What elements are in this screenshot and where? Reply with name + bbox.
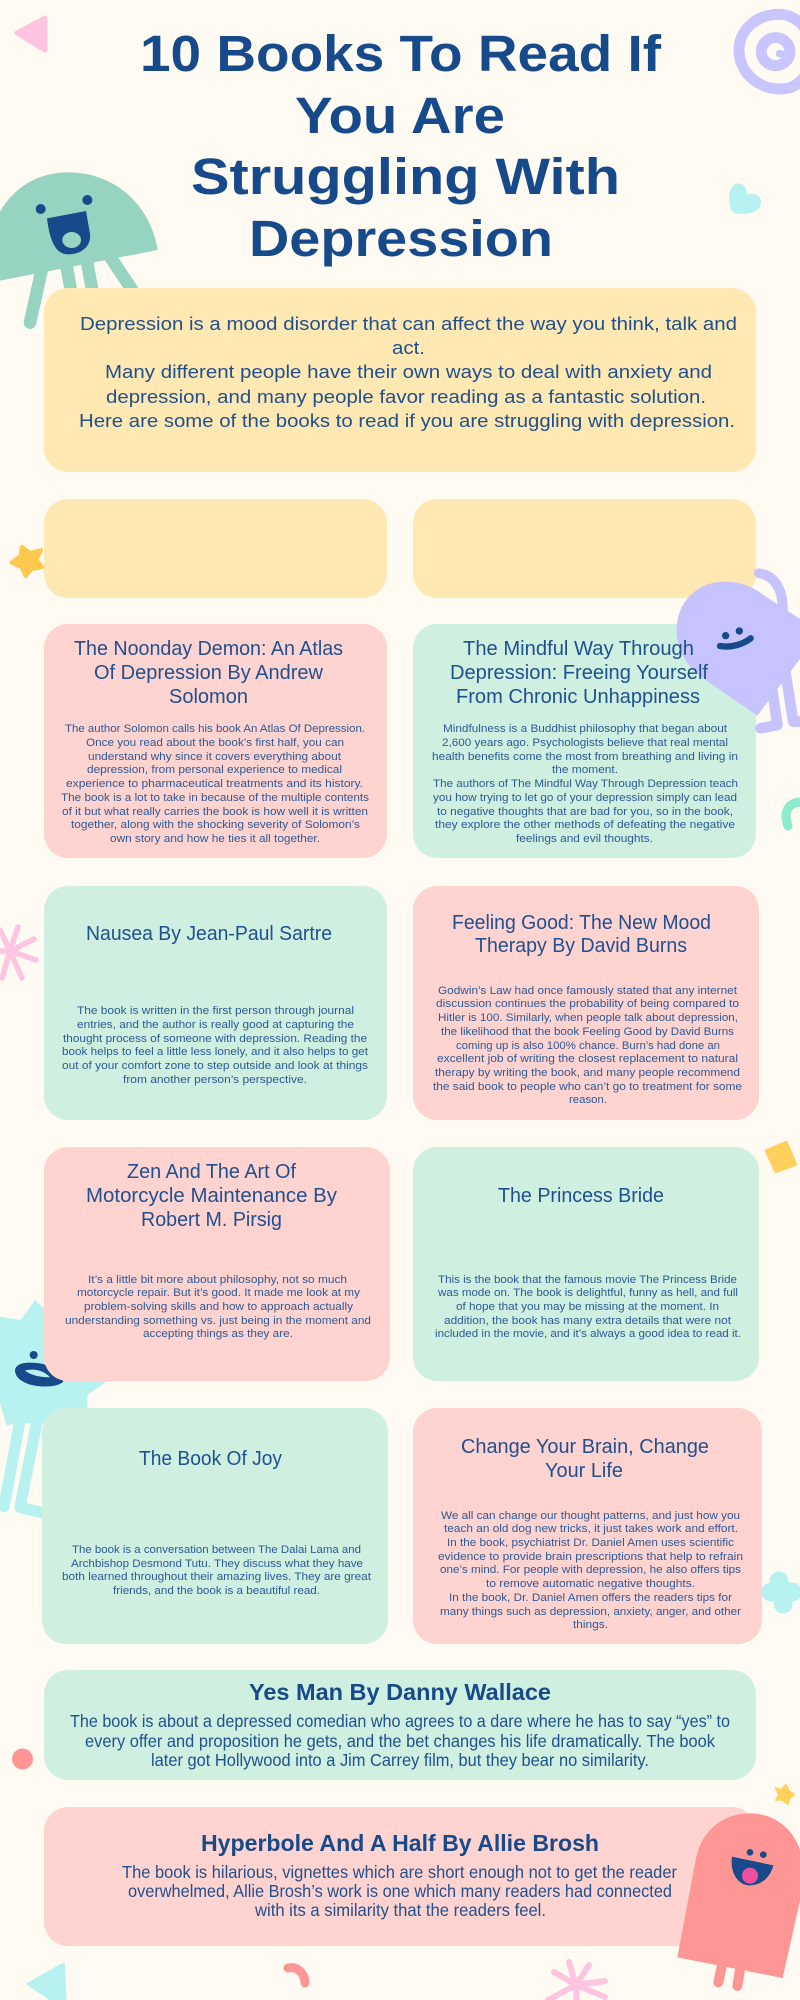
icon: purple spiral (739, 14, 800, 89)
text: The Mindful Way body: The authors of The Mindful Way Through Depression teach (433, 778, 738, 790)
text: Change Your Brain body: evidence to provide brain prescriptions that help to refrain (438, 1551, 743, 1563)
icon: green arc (786, 802, 800, 826)
text: Hyperbole body: The book is hilarious, vignettes which are short enough not to get the reader (122, 1862, 677, 1882)
text: Feeling Good body: Hitler is 100. Similarly, when people talk about depression, (438, 1012, 738, 1024)
panel: Feeling Good (413, 886, 759, 1120)
panel: introduction: Many different people have their own ways to deal with anxiety and (105, 361, 712, 382)
character: purple creature (677, 573, 800, 728)
icon: pink asterisk bottom (548, 1962, 605, 2000)
text: The Book Of Joy body (62, 1544, 372, 1597)
text: Nausea body: from another person’s perspective. (123, 1074, 307, 1086)
text: The Book Of Joy body: The book is a conversation between The Dalai Lama and (72, 1544, 361, 1556)
text: The Noonday Demon body: Once you read about the book’s first half, you can (86, 737, 344, 749)
text: The Mindful Way body (432, 723, 738, 845)
text: Change Your Brain body: We all can change our thought patterns, and just how you (441, 1510, 740, 1522)
text: Nausea body: book helps to feel a little less lonely, and it also helps to get (62, 1046, 369, 1058)
text: Nausea body: thought process of someone with depression. Reading the (63, 1033, 367, 1045)
text: Yes Man body: The book is about a depressed comedian who agrees to a dare where he has to say “yes” to (70, 1711, 730, 1731)
text: Zen body (65, 1274, 371, 1340)
heading: The Mindful Way: Depression: Freeing Yourself (450, 662, 708, 684)
text: The Princess Bride body (435, 1274, 741, 1340)
text: The Mindful Way body: feelings and evil thoughts. (516, 833, 653, 845)
heading: Feeling Good: Feeling Good: The New Mood (452, 912, 711, 934)
text: Change Your Brain body: In the book, Dr. Daniel Amen offers the readers tips for (449, 1592, 732, 1604)
text: Change Your Brain body: many things such as depression, anxiety, anger, and other (440, 1606, 741, 1618)
heading: Zen: Motorcycle Maintenance By (86, 1185, 337, 1207)
text: The Noonday Demon body: depression, from personal experience to medical (87, 764, 342, 776)
text: Feeling Good body: therapy by writing the book, and many people recommend (435, 1067, 740, 1079)
text: The Princess Bride body: included in the movie, and it’s always a good idea to read it. (435, 1328, 741, 1340)
icon: small yellow star (776, 1785, 794, 1804)
text: Change Your Brain body: things. (573, 1619, 608, 1631)
panel: empty yellow card left (44, 499, 387, 598)
heading: Change Your Brain: Change Your Brain, Change (461, 1436, 709, 1458)
text: The Princess Bride body: This is the book that the famous movie The Princess Bride (438, 1274, 737, 1286)
title (140, 25, 662, 267)
panel: The Book Of Joy (42, 1408, 388, 1644)
heading: Change Your Brain: Your Life (545, 1460, 623, 1482)
heading: Zen: Robert M. Pirsig (141, 1209, 282, 1231)
icon: salmon dot (12, 1748, 33, 1770)
heading: Zen: Zen And The Art Of (127, 1161, 296, 1183)
title: You Are (295, 87, 505, 144)
text: The Mindful Way body: 2,600 years ago. Psychologists believe that real mental (442, 737, 728, 749)
text: The Noonday Demon body (61, 723, 369, 845)
text: Feeling Good body: Godwin’s Law had once famously stated that any internet (438, 985, 738, 997)
text: The Noonday Demon body: together, along with the shocking severity of Solomon’s (71, 819, 360, 831)
text: Yes Man body: later got Hollywood into a Jim Carrey film, but they bear no similarity. (151, 1750, 649, 1770)
text: Change Your Brain body: one’s mind. For people with depression, he also offers tips (440, 1564, 741, 1576)
text: Feeling Good body: discussion continues the probability of being compared to (436, 998, 739, 1010)
icon: yellow diamond (767, 1143, 795, 1171)
character: green jellyfish (0, 172, 158, 323)
panel: introduction: depression, and many people favor reading as a fantastic solution. (106, 386, 706, 407)
title: Depression (249, 210, 553, 267)
character: salmon ghost (677, 1813, 800, 1986)
icon: cyan triangle (29, 1965, 65, 2000)
text: Feeling Good body: the likelihood that the book Feeling Good by David Burns (441, 1026, 734, 1038)
heading: Yes Man: Yes Man By Danny Wallace (249, 1679, 551, 1705)
text: The Mindful Way body: the moment. (552, 764, 618, 776)
heading: The Princess Bride: The Princess Bride (498, 1185, 664, 1207)
title: 10 Books To Read If (140, 25, 662, 82)
text: The Book Of Joy body: friends, and the book is a beautiful read. (113, 1585, 320, 1597)
text: Zen body: problem-solving skills and how to approach actually (84, 1301, 353, 1313)
text: The Princess Bride body: was mode on. The book is delightful, funny as hell, and full (437, 1287, 738, 1299)
text: The Mindful Way body: to negative thoughts that are bad for you, so in the book, (437, 806, 733, 818)
text: The Noonday Demon body: of it but what really carries the book is how well it is written (62, 806, 368, 818)
text: Feeling Good body: reason. (569, 1094, 607, 1106)
text: The Princess Bride body: addition, the book has many extra details that were not (444, 1315, 732, 1327)
text: The Princess Bride body: of hope that you may be missing at the moment. In (456, 1301, 719, 1313)
panel: The Noonday Demon (44, 624, 387, 858)
text: Change Your Brain body: In the book, psychiatrist Dr. Daniel Amen uses scientific (447, 1537, 734, 1549)
heading: Feeling Good: Therapy By David Burns (475, 935, 687, 957)
text: Hyperbole body (122, 1862, 677, 1920)
text: Change Your Brain body (438, 1510, 743, 1631)
heading: The Book Of Joy: The Book Of Joy (139, 1448, 282, 1470)
text: Yes Man body: every offer and proposition he gets, and the bet changes his life dramatically. The book (85, 1731, 715, 1751)
text: Feeling Good body: excellent job of writing the closest replacement to natural (437, 1053, 738, 1065)
text: Nausea body: entries, and the author is really good at capturing the (77, 1019, 354, 1031)
heading: The Mindful Way: From Chronic Unhappiness (456, 686, 700, 708)
text: The Noonday Demon body: The book is a lot to take in because of the multiple contents (61, 792, 369, 804)
text: Nausea body (62, 1005, 369, 1086)
text: Feeling Good body (433, 985, 742, 1106)
text: Change Your Brain body: teach an old dog new tricks, it just takes work and effort. (444, 1523, 738, 1535)
text: The Noonday Demon body: experience to pharmaceutical treatments and its history. (66, 778, 363, 790)
panel: introduction: Depression is a mood disorder that can affect the way you think, talk and (80, 313, 737, 334)
icon: pink triangle (17, 18, 45, 50)
panel: Change Your Brain (413, 1408, 762, 1644)
text: The Mindful Way body: you how trying to let go of your depression simply can lead (433, 792, 737, 804)
text: The Noonday Demon body: understand why since it covers everything about (88, 751, 342, 763)
heading: The Mindful Way (450, 638, 708, 708)
text: Hyperbole body: overwhelmed, Allie Brosh’s work is one which many readers had connected (128, 1881, 672, 1901)
panel: Nausea (44, 886, 387, 1120)
heading: The Noonday Demon (74, 638, 343, 708)
text: The Mindful Way body: health benefits come the most from breathing and living in (432, 751, 738, 763)
icon: cyan clover (762, 1572, 800, 1614)
panel: The Mindful Way (413, 624, 756, 858)
heading: Nausea: Nausea By Jean-Paul Sartre (86, 923, 332, 945)
text: The Mindful Way body: Mindfulness is a Buddhist philosophy that began about (443, 723, 728, 735)
panel: empty yellow card right (413, 499, 756, 598)
text: The Book Of Joy body: both learned throughout their amazing lives. They are great (62, 1571, 372, 1583)
text: Zen body: motorcycle repair. But it’s good. It made me look at my (77, 1287, 360, 1299)
text: Zen body: understanding something vs. just being in the moment and (65, 1315, 371, 1327)
text: Hyperbole body: with its a similarity that the readers feel. (254, 1900, 546, 1920)
text: The Mindful Way body: they explore the other methods of defeating the negative (435, 819, 735, 831)
title: Struggling With (191, 148, 620, 205)
heading: Change Your Brain (461, 1436, 709, 1482)
panel: Zen And The Art Of Motorcycle Maintenance (44, 1147, 390, 1381)
panel: introduction (44, 288, 756, 472)
icon: salmon arc (288, 1968, 305, 1983)
text: Feeling Good body: the said book to people who can’t go to treatment for some (433, 1081, 742, 1093)
text: The Noonday Demon body: own story and how he ties it all together. (110, 833, 320, 845)
text: The Book Of Joy body: Archbishop Desmond Tutu. They discuss what they have (71, 1558, 363, 1570)
text: Yes Man body (70, 1711, 730, 1770)
text: Zen body: accepting things as they are. (143, 1328, 293, 1340)
icon: cyan heart (729, 183, 761, 214)
text: Nausea body: out of your comfort zone to step outside and look at things (62, 1060, 368, 1072)
panel: introduction: act. (392, 337, 425, 358)
panel: Hyperbole And A Half (44, 1807, 756, 1946)
heading: Hyperbole And A Half: Hyperbole And A Half By Allie Brosh (201, 1830, 599, 1856)
heading: The Noonday Demon: Of Depression By Andrew (94, 662, 324, 684)
panel: Yes Man (44, 1670, 756, 1780)
text: The Noonday Demon body: The author Solomon calls his book An Atlas Of Depression. (65, 723, 365, 735)
text: Change Your Brain body: to remove automatic negative thoughts. (486, 1578, 695, 1590)
text: Zen body: It’s a little bit more about philosophy, not so much (88, 1274, 347, 1286)
heading: The Mindful Way: The Mindful Way Through (463, 638, 694, 660)
panel: The Princess Bride (413, 1147, 759, 1381)
text: Nausea body: The book is written in the first person through journal (77, 1005, 354, 1017)
icon: yellow star left (12, 547, 42, 576)
heading: Zen (86, 1161, 337, 1231)
icon: pink asterisk left (0, 927, 36, 978)
heading: The Noonday Demon: The Noonday Demon: An Atlas (74, 638, 343, 660)
character: cyan creature (0, 1300, 113, 1513)
heading: The Noonday Demon: Solomon (169, 686, 248, 708)
text: Feeling Good body: coming up is also 100% chance. Burn’s had done an (456, 1040, 720, 1052)
panel: introduction: Here are some of the books to read if you are struggling with depression. (79, 410, 735, 431)
heading: Feeling Good (452, 912, 711, 957)
